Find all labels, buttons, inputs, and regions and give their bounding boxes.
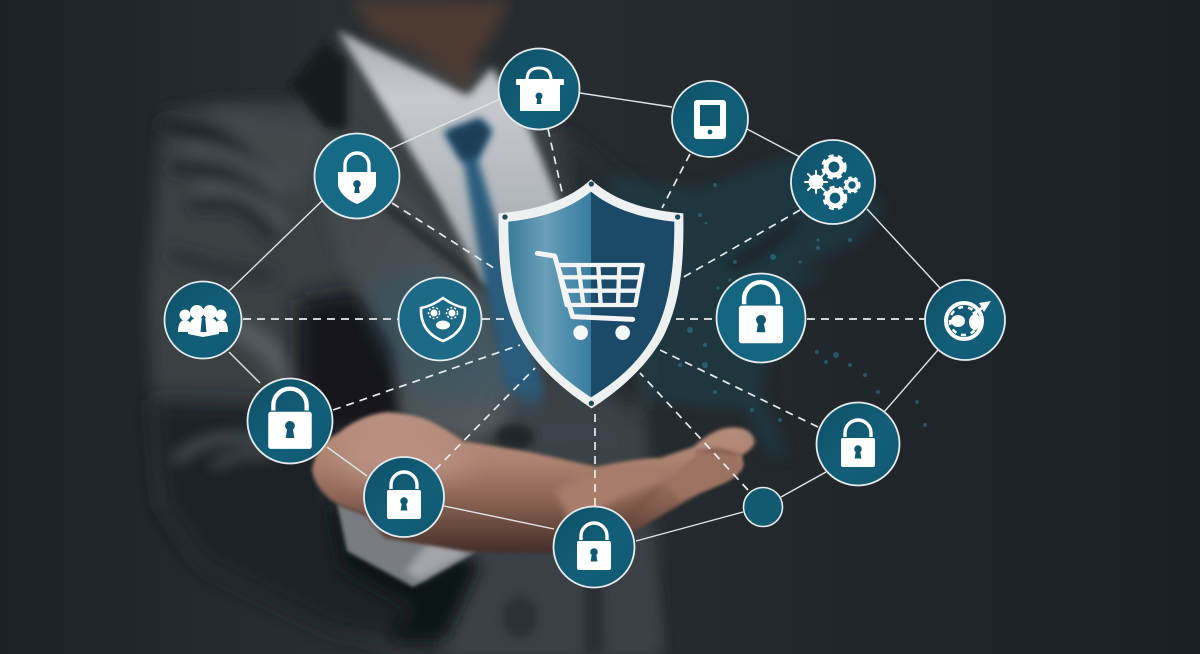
shopping cart <box>537 253 643 319</box>
face and neck <box>352 0 508 92</box>
shirt <box>337 30 566 300</box>
forearm dark <box>150 400 445 654</box>
node: tablet <box>672 81 748 157</box>
node: gears <box>791 140 875 224</box>
upper arm folds <box>165 110 330 400</box>
node: padlock on hand <box>364 457 444 537</box>
node: padlock bottom <box>554 506 634 588</box>
node: padlock top left <box>314 134 400 218</box>
finger crease <box>622 486 663 528</box>
finger gap <box>695 451 742 456</box>
shirt cuff <box>337 504 477 587</box>
solid network links <box>229 93 940 541</box>
hand <box>312 412 755 553</box>
chest teal tint <box>365 272 510 400</box>
palm highlight <box>340 436 480 490</box>
tie knot shade <box>446 120 490 160</box>
jacket silhouette <box>147 40 662 654</box>
node: people group <box>164 282 242 358</box>
node: target with arrow <box>925 280 1005 360</box>
placket stripe <box>584 548 604 654</box>
collar dark lapel <box>290 42 347 130</box>
node: small shield with gears <box>398 278 482 360</box>
jacket buttons <box>502 596 538 638</box>
dashed links to shield <box>243 129 925 506</box>
node: top basket lock <box>498 48 580 130</box>
jacket right side shade <box>560 130 660 410</box>
necktie <box>444 118 545 420</box>
gap between arm and torso <box>296 290 420 440</box>
node: padlock right lower <box>816 402 900 486</box>
node: padlock right middle <box>716 274 806 362</box>
lapel shadow <box>385 205 485 285</box>
photo: businessman in suit <box>147 0 755 654</box>
node: small empty <box>744 488 782 526</box>
cuff shadow <box>327 505 480 640</box>
node: padlock left <box>248 378 332 464</box>
cuff highlight <box>405 540 470 580</box>
torso under shield <box>500 400 650 470</box>
chest and lapel <box>320 125 525 440</box>
finger <box>555 466 663 520</box>
central shield with shopping cart <box>499 179 683 408</box>
world map glow <box>610 155 927 457</box>
forearm highlights <box>178 437 270 465</box>
finger shade <box>668 447 743 500</box>
torso below hand <box>440 520 662 654</box>
